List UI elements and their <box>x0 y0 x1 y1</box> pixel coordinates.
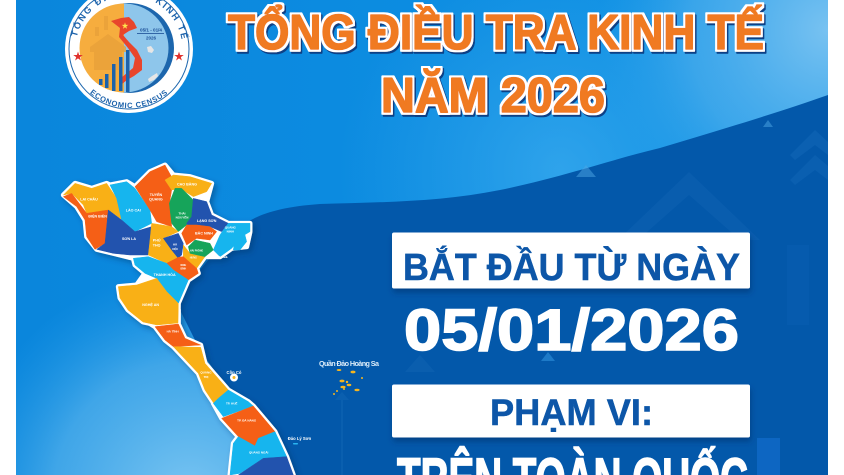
map north provinces: NINH <box>180 265 186 267</box>
logo: economic census seal <box>65 0 193 113</box>
map north provinces: SƠN LA <box>122 237 136 241</box>
map north provinces: PHÚ <box>153 238 161 243</box>
Hoàng Sa islands <box>333 369 363 395</box>
map north provinces: THÁI <box>179 211 186 216</box>
map south provinces <box>155 324 293 475</box>
map north provinces: BẮC NINH <box>195 231 213 236</box>
map north provinces <box>63 165 250 325</box>
map south provinces: TP. ĐÀ NẴNG <box>237 418 257 423</box>
map north provinces: NGUYÊN <box>176 215 188 220</box>
map outline south <box>128 310 293 475</box>
map south provinces: QUẢNG <box>200 369 212 374</box>
logo: ring text lower: ECONOMIC CENSUS <box>90 89 167 108</box>
logo: stars: ★ <box>174 52 184 63</box>
logo: rising bars <box>99 50 130 92</box>
map north provinces: HẢI PHÒNG <box>190 250 203 253</box>
map outline north <box>63 165 250 325</box>
map north provinces: ĐIỆN BIÊN <box>88 214 107 219</box>
map north provinces: Cát Bà <box>218 255 228 259</box>
logo: stars: ★ <box>73 52 83 63</box>
map north provinces: TUYÊN <box>150 192 163 197</box>
label: Cồn Cỏ: Cồn Cỏ <box>227 370 242 375</box>
map south provinces: HÀ TĨNH <box>167 328 179 333</box>
map of Vietnam <box>63 165 293 475</box>
box: scope label: PHẠM VI: <box>490 392 653 433</box>
icon: Lý Sơn island <box>293 443 298 444</box>
map north provinces: NGHỆ AN <box>142 302 159 307</box>
map north provinces: LÀO CAI <box>126 207 141 212</box>
logo: building <box>90 16 126 70</box>
logo: date text <box>137 28 164 40</box>
map south provinces: QUẢNG NGÃI <box>249 450 269 455</box>
label: Hoàng Sa: Quần Đảo Hoàng Sa <box>319 359 380 368</box>
islands and labels <box>227 359 380 444</box>
label: Đảo Lý Sơn: Đảo Lý Sơn <box>288 436 312 441</box>
start date: 05/01/2026 <box>404 298 739 363</box>
dark blue wave panel <box>175 95 828 475</box>
map north provinces: HÀ <box>173 242 178 247</box>
map south provinces: TP. HUẾ <box>226 401 237 406</box>
map north provinces: QUANG <box>149 197 163 201</box>
title: TỔNG ĐIỀU TRA KINH TẾ <box>228 5 764 60</box>
map north provinces: HƯNG <box>190 258 197 260</box>
map north provinces: QUẢNG <box>225 225 237 230</box>
logo: star on map: ★ <box>122 22 128 30</box>
map north provinces: LẠNG SƠN <box>197 219 217 223</box>
logo: stars <box>73 52 184 63</box>
box: start date label: BẮT ĐẦU TỪ NGÀY <box>403 245 740 289</box>
map north provinces: NỘI <box>172 246 178 251</box>
logo: red map of Vietnam <box>111 17 142 84</box>
map north provinces: LAI CHÂU <box>80 197 98 202</box>
logo: date text: 2026 <box>146 36 157 40</box>
map north provinces: THANH HÓA <box>154 272 176 277</box>
map north provinces: NINH <box>227 230 234 234</box>
title <box>228 5 764 123</box>
map north provinces: BÌNH <box>180 267 186 270</box>
map north provinces: THỌ <box>153 243 161 247</box>
map north provinces: CAO BẰNG <box>177 182 197 187</box>
map south provinces: TRỊ <box>204 375 209 379</box>
icon: Cồn Cỏ island <box>230 374 238 382</box>
logo: islands <box>147 46 158 82</box>
logo: date text: 05/1 - 01/4 <box>140 28 162 32</box>
box: scope label <box>392 384 750 438</box>
title: NĂM 2026 <box>381 69 605 123</box>
